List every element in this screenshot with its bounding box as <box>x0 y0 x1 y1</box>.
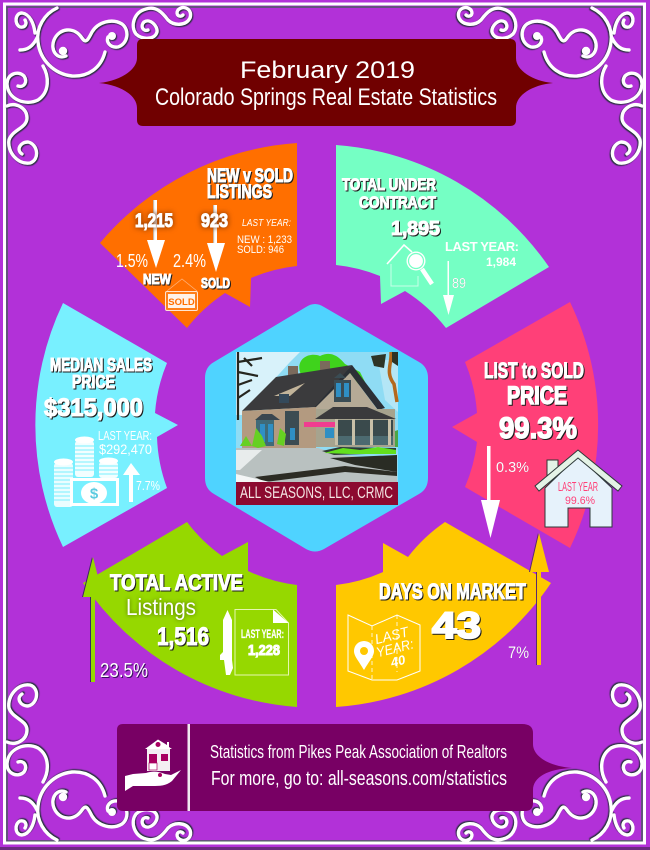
arrow: up 7% <box>530 533 549 665</box>
divider <box>188 724 190 811</box>
icon: document with last year: LAST YEAR: <box>241 627 284 641</box>
arrow: up 7.7% <box>123 463 140 502</box>
arrow: new listings down <box>147 200 165 268</box>
text: last year: LAST YEAR: <box>98 428 152 443</box>
text: last year: LAST YEAR: <box>242 217 291 229</box>
footer banner <box>117 724 572 811</box>
heading: new v sold listings: NEW v SOLD <box>207 166 293 187</box>
text: last year 40: YEAR: <box>374 636 415 660</box>
title line 1: February 2019 <box>240 57 415 84</box>
icon: document with last year: 1,228 <box>248 642 280 659</box>
heading: median sales price <box>50 355 152 392</box>
labels: new and sold: NEW <box>143 271 172 288</box>
percent changes: 2.4% <box>173 251 206 271</box>
ornament: top left corner <box>7 8 191 163</box>
change: 7.7%: 7.7% <box>136 478 160 493</box>
change: 0.3%: 0.3% <box>496 459 529 476</box>
value: new and sold counts <box>135 211 228 232</box>
value: 43: 43 <box>432 605 481 646</box>
icon: sold sign: SOLD <box>168 297 195 308</box>
title banner <box>99 39 553 126</box>
arrow: down 0.3% <box>481 446 500 538</box>
heading: total under contract: CONTRACT <box>359 193 436 212</box>
icon: house with last year: LAST YEAR <box>558 479 598 494</box>
footer text <box>210 742 507 790</box>
heading: list to sold price: LIST to SOLD <box>484 358 584 383</box>
percent changes: 1.5% <box>116 251 148 271</box>
footer text: For more, go to: all-seasons.com/statistics <box>211 768 507 790</box>
panel: total active listings <box>83 522 297 707</box>
subheading: listings: Listings <box>126 594 196 620</box>
logo: house illustration <box>236 352 398 505</box>
change: 89: 89 <box>452 275 466 292</box>
icon: map with last year <box>348 615 420 680</box>
text: last year 40: LAST <box>373 623 411 647</box>
change: 7%: 7% <box>508 643 529 662</box>
heading: total active: TOTAL ACTIVE <box>110 570 243 595</box>
icon: sold sign <box>166 279 198 310</box>
value: 1,516: 1,516 <box>157 623 209 651</box>
heading: total under contract <box>342 175 436 212</box>
heading: new v sold listings <box>207 166 293 203</box>
icon: coins and banknote <box>54 436 119 507</box>
icon: coins and banknote: $ <box>90 486 99 502</box>
text: last year: 1,984 <box>486 255 516 269</box>
text: last year 40 <box>371 623 418 673</box>
percent changes <box>116 251 206 271</box>
text: last year: SOLD: 946 <box>237 244 284 256</box>
panel: new vs sold listings <box>100 143 297 328</box>
ornament: bottom left corner <box>7 685 191 840</box>
logo: name bar: ALL SEASONS, LLC, CRMC <box>240 483 393 502</box>
value: 1,895: 1,895 <box>391 218 440 240</box>
icon: pen <box>220 610 233 675</box>
icon: house with last year: 99.6% <box>565 495 595 507</box>
labels: new and sold <box>143 271 230 292</box>
logo: name bar <box>236 482 398 505</box>
heading: median sales price: MEDIAN SALES <box>50 355 152 375</box>
right tree <box>389 352 397 402</box>
heading: median sales price: PRICE <box>72 372 115 392</box>
value: new and sold counts: 923 <box>201 211 228 232</box>
ornament: top right corner <box>458 8 642 163</box>
ornament: bottom right corner <box>458 685 642 840</box>
icon: document with last year <box>235 610 288 675</box>
center hexagon <box>205 304 428 552</box>
arrow: up 23.5% <box>83 557 103 682</box>
panel: list to sold price <box>452 302 598 548</box>
heading: total under contract: TOTAL UNDER <box>342 175 436 194</box>
labels: new and sold: SOLD <box>201 275 230 292</box>
arrow: sold listings down <box>207 205 225 272</box>
panel: total under contract <box>336 145 549 328</box>
panel: days on market <box>336 522 551 707</box>
heading: list to sold price <box>484 358 584 410</box>
heading: days on market: DAYS ON MARKET <box>379 579 526 604</box>
arrow: down 89 <box>443 261 454 315</box>
footer text: Statistics from Pikes Peak Association of Realtors <box>210 742 507 762</box>
heading: list to sold price: PRICE <box>507 382 567 410</box>
panel: median sales price <box>35 303 178 547</box>
text: last year <box>237 217 292 256</box>
text: last year 40: 40 <box>388 652 408 670</box>
left tree branches <box>238 352 262 420</box>
change: 23.5%: 23.5% <box>100 660 148 682</box>
text: last year <box>445 239 519 269</box>
value: 99.3%: 99.3% <box>499 412 577 445</box>
icon: house on hand <box>125 740 181 791</box>
title line 2: Colorado Springs Real Estate Statistics <box>155 84 497 111</box>
icon: house with last year <box>535 450 622 527</box>
text: last year: $292,470 <box>99 441 152 457</box>
value: $315,000: $315,000 <box>44 394 143 422</box>
icon: house and magnifier <box>387 245 432 286</box>
text: last year <box>98 428 152 457</box>
text: last year: NEW : 1,233 <box>237 234 292 246</box>
heading: new v sold listings: LISTINGS <box>207 182 272 203</box>
text: last year: LAST YEAR: <box>445 239 519 254</box>
value: new and sold counts: 1,215 <box>135 211 173 232</box>
